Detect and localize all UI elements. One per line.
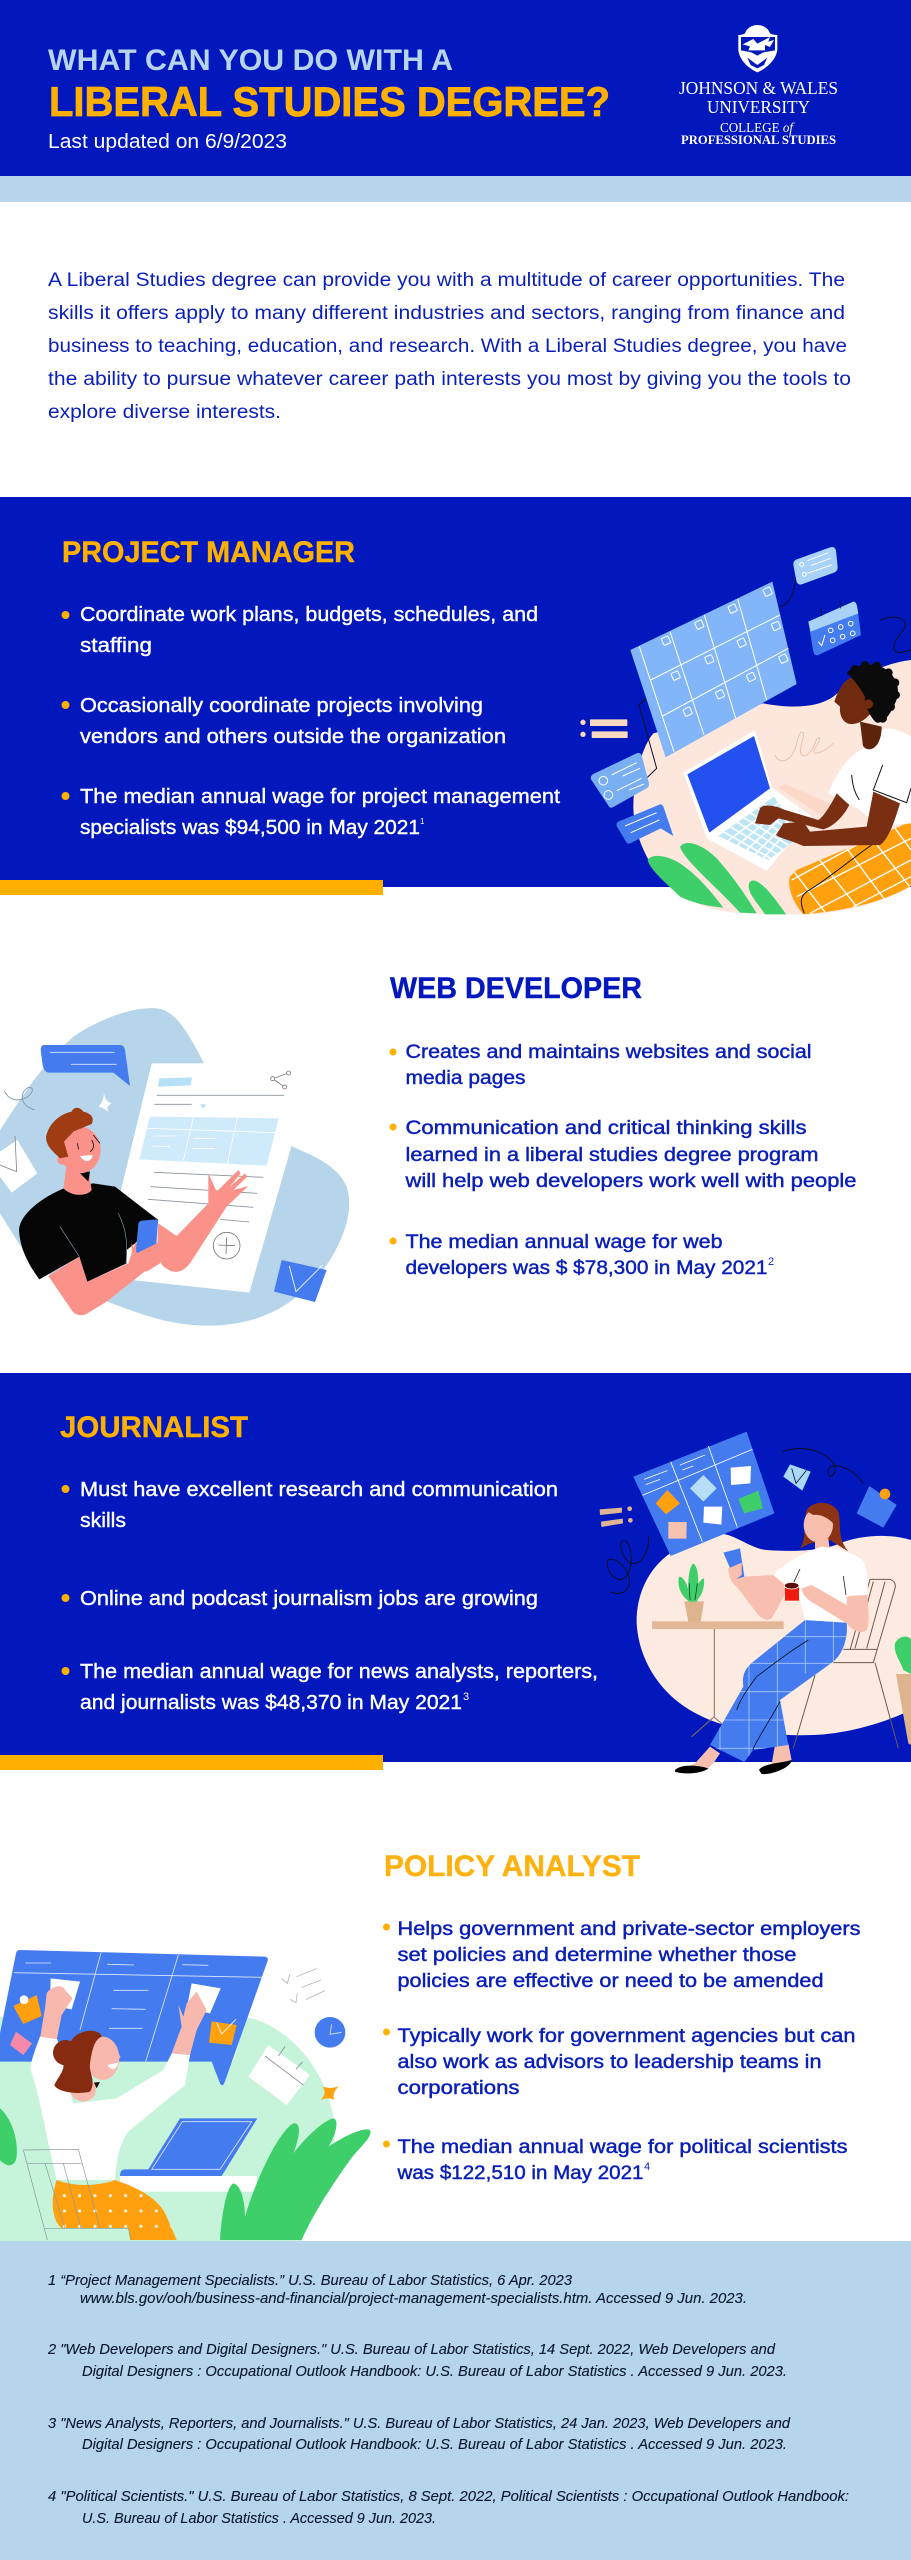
illustration: journalist with phone and coffee — [600, 1432, 911, 1774]
heading: WEB DEVELOPER — [390, 972, 642, 1005]
bullet list: 1 — [420, 817, 425, 826]
bullet list: set policies and determine whether those — [398, 1945, 796, 1966]
icon: table and plant — [652, 1563, 784, 1737]
bullet list: Helps government and private-sector employers — [398, 1919, 860, 1940]
reference 4 — [48, 2489, 849, 2527]
icon: kanban board — [633, 1432, 774, 1556]
reference 2 — [47, 2342, 787, 2380]
reference 3: 3 "News Analysts, Reporters, and Journalists." U.S. Bureau of Labor Statistics, 24 Jan. 2023, Web Developers and — [48, 2416, 791, 2432]
icon: chair — [793, 1579, 898, 1748]
icon: white card and checks — [248, 1969, 325, 2105]
logo: university crest and wordmark: UNIVERSITY — [707, 97, 810, 117]
icon: squiggles — [607, 1449, 863, 1593]
icon: check note — [274, 1260, 327, 1302]
logo: university crest and wordmark — [679, 25, 838, 147]
bullet list: Communication and critical thinking skills — [406, 1118, 806, 1139]
bullet list: corporations — [398, 2078, 520, 2099]
icon: check note and blue note — [783, 1464, 897, 1528]
heading: PROJECT MANAGER — [62, 536, 355, 569]
bullet list: policies are effective or need to be amended — [398, 1971, 824, 1992]
icon: laptop and desk — [120, 2118, 257, 2192]
bullet list: and journalists was $48,370 in May 2021 — [80, 1692, 462, 1714]
intro paragraph: skills it offers apply to many different industries and sectors, ranging from finance and — [48, 303, 845, 324]
panel: references — [0, 2241, 911, 2560]
intro paragraph: business to teaching, education, and research. With a Liberal Studies degree, you have — [48, 336, 847, 357]
icon: crest shield — [738, 25, 777, 72]
icon: woman reaching — [31, 1986, 207, 2240]
icon: corner plant — [895, 1637, 911, 1745]
bullet list: The median annual wage for political scientists — [398, 2137, 848, 2158]
bullet list: 4 — [644, 2161, 650, 2173]
bullet list: Coordinate work plans, budgets, schedules, and — [80, 604, 538, 626]
bullet list: will help web developers work well with people — [404, 1171, 856, 1192]
intro paragraph — [48, 270, 851, 423]
bullet list: media pages — [406, 1068, 526, 1089]
bullet list: was $122,510 in May 2021 — [396, 2163, 644, 2184]
logo: university crest and wordmark: COLLEGE of — [720, 121, 795, 136]
icon: calendar board — [630, 573, 797, 777]
title line 2: LIBERAL STUDIES DEGREE? — [49, 78, 610, 125]
icon: small calendar — [808, 601, 861, 655]
icon: clock — [315, 2017, 345, 2048]
bullet list: vendors and others outside the organization — [80, 726, 506, 748]
bullet list: The median annual wage for project management — [80, 786, 560, 808]
illustration: web developer with document — [0, 1008, 349, 1326]
bullet list: Must have excellent research and communication — [80, 1479, 558, 1501]
reference 3: Digital Designers : Occupational Outlook Handbook: U.S. Bureau of Labor Statistics . Accessed 9 Jun. 2023. — [82, 2437, 787, 2453]
bullet list: 3 — [463, 1691, 469, 1703]
panel: project manager — [0, 497, 911, 914]
intro paragraph: the ability to pursue whatever career path interests you most by giving you the tools to — [48, 369, 851, 390]
icon: squiggle — [879, 617, 911, 653]
panel: web developer — [0, 972, 856, 1326]
reference 1 — [48, 2273, 747, 2307]
icon: checklist card — [591, 753, 649, 808]
logo: university crest and wordmark: PROFESSIONAL STUDIES — [681, 132, 836, 147]
icon: woman — [675, 1503, 869, 1774]
icon: leaves — [648, 843, 786, 914]
bullet list: 2 — [768, 1256, 774, 1268]
reference 4: 4 "Political Scientists." U.S. Bureau of Labor Statistics, 8 Sept. 2022, Political Scientists : Occupational Outlook Handbook: — [48, 2489, 849, 2505]
illustration: project manager at laptop — [580, 547, 911, 914]
intro paragraph: explore diverse interests. — [48, 402, 281, 423]
bullet list — [62, 1479, 598, 1714]
icon: person at laptop — [755, 661, 911, 846]
reference 3 — [48, 2416, 791, 2453]
bullet list: Occasionally coordinate projects involving — [80, 695, 483, 717]
icon: sparkle and squiggle — [4, 1087, 112, 1113]
last updated date: Last updated on 6/9/2023 — [48, 131, 287, 153]
bullet list: The median annual wage for news analysts, reporters, — [80, 1661, 598, 1683]
heading: JOURNALIST — [60, 1411, 248, 1444]
heading: POLICY ANALYST — [384, 1850, 640, 1883]
header panel — [0, 0, 911, 202]
intro paragraph: A Liberal Studies degree can provide you with a multitude of career opportunities. The — [48, 270, 845, 291]
icon: chat bubble — [617, 804, 673, 844]
reference 2: 2 "Web Developers and Digital Designers." U.S. Bureau of Labor Statistics, 14 Sept. 2022, Web Developers and — [47, 2342, 776, 2358]
accent bar — [0, 880, 383, 895]
bullet list: developers was $ $78,300 in May 2021 — [406, 1258, 768, 1279]
icon: white card — [0, 1136, 37, 1193]
icon: document — [100, 1063, 302, 1293]
bullet list: Online and podcast journalism jobs are growing — [80, 1588, 538, 1610]
bullet list: staffing — [80, 635, 152, 657]
bullet list: skills — [80, 1510, 126, 1532]
reference 2: Digital Designers : Occupational Outlook Handbook: U.S. Bureau of Labor Statistics . Accessed 9 Jun. 2023. — [82, 2364, 787, 2380]
icon: chat bubble — [41, 1045, 130, 1086]
panel: policy analyst — [0, 1850, 860, 2241]
bullet list: The median annual wage for web — [406, 1232, 722, 1253]
icon: list marks — [580, 719, 628, 738]
icon: orange cushion — [789, 822, 911, 914]
bullet list: learned in a liberal studies degree program — [406, 1145, 818, 1166]
icon: chair — [23, 2149, 132, 2240]
icon: plants — [0, 2108, 371, 2240]
icon: person with phone — [19, 1108, 248, 1315]
icon: star — [321, 2086, 339, 2100]
bullet list: also work as advisors to leadership teams in — [398, 2052, 822, 2073]
logo: university crest and wordmark: JOHNSON & WALES — [679, 78, 838, 98]
bullet list — [390, 1042, 856, 1279]
icon: board — [0, 1950, 268, 2085]
reference 1: 1 “Project Management Specialists.” U.S. Bureau of Labor Statistics, 6 Apr. 2023 — [48, 2273, 572, 2289]
title line 1: WHAT CAN YOU DO WITH A — [48, 44, 453, 77]
panel: journalist — [0, 1373, 911, 1774]
icon: list marks — [600, 1506, 633, 1527]
icon: task card — [793, 547, 838, 585]
icon: laptop — [683, 730, 812, 871]
bullet list — [383, 1919, 860, 2184]
accent bar — [0, 1755, 383, 1770]
bullet list — [62, 604, 560, 839]
illustration: policy analyst at board — [0, 1950, 371, 2241]
bullet list: Typically work for government agencies but can — [398, 2026, 856, 2047]
reference 4: U.S. Bureau of Labor Statistics . Accessed 9 Jun. 2023. — [82, 2511, 436, 2527]
bullet list: Creates and maintains websites and social — [406, 1042, 812, 1063]
bullet list: specialists was $94,500 in May 2021 — [80, 817, 420, 839]
reference 1: www.bls.gov/ooh/business-and-financial/project-management-specialists.htm. Accessed 9 Jun. 2023. — [80, 2291, 747, 2307]
